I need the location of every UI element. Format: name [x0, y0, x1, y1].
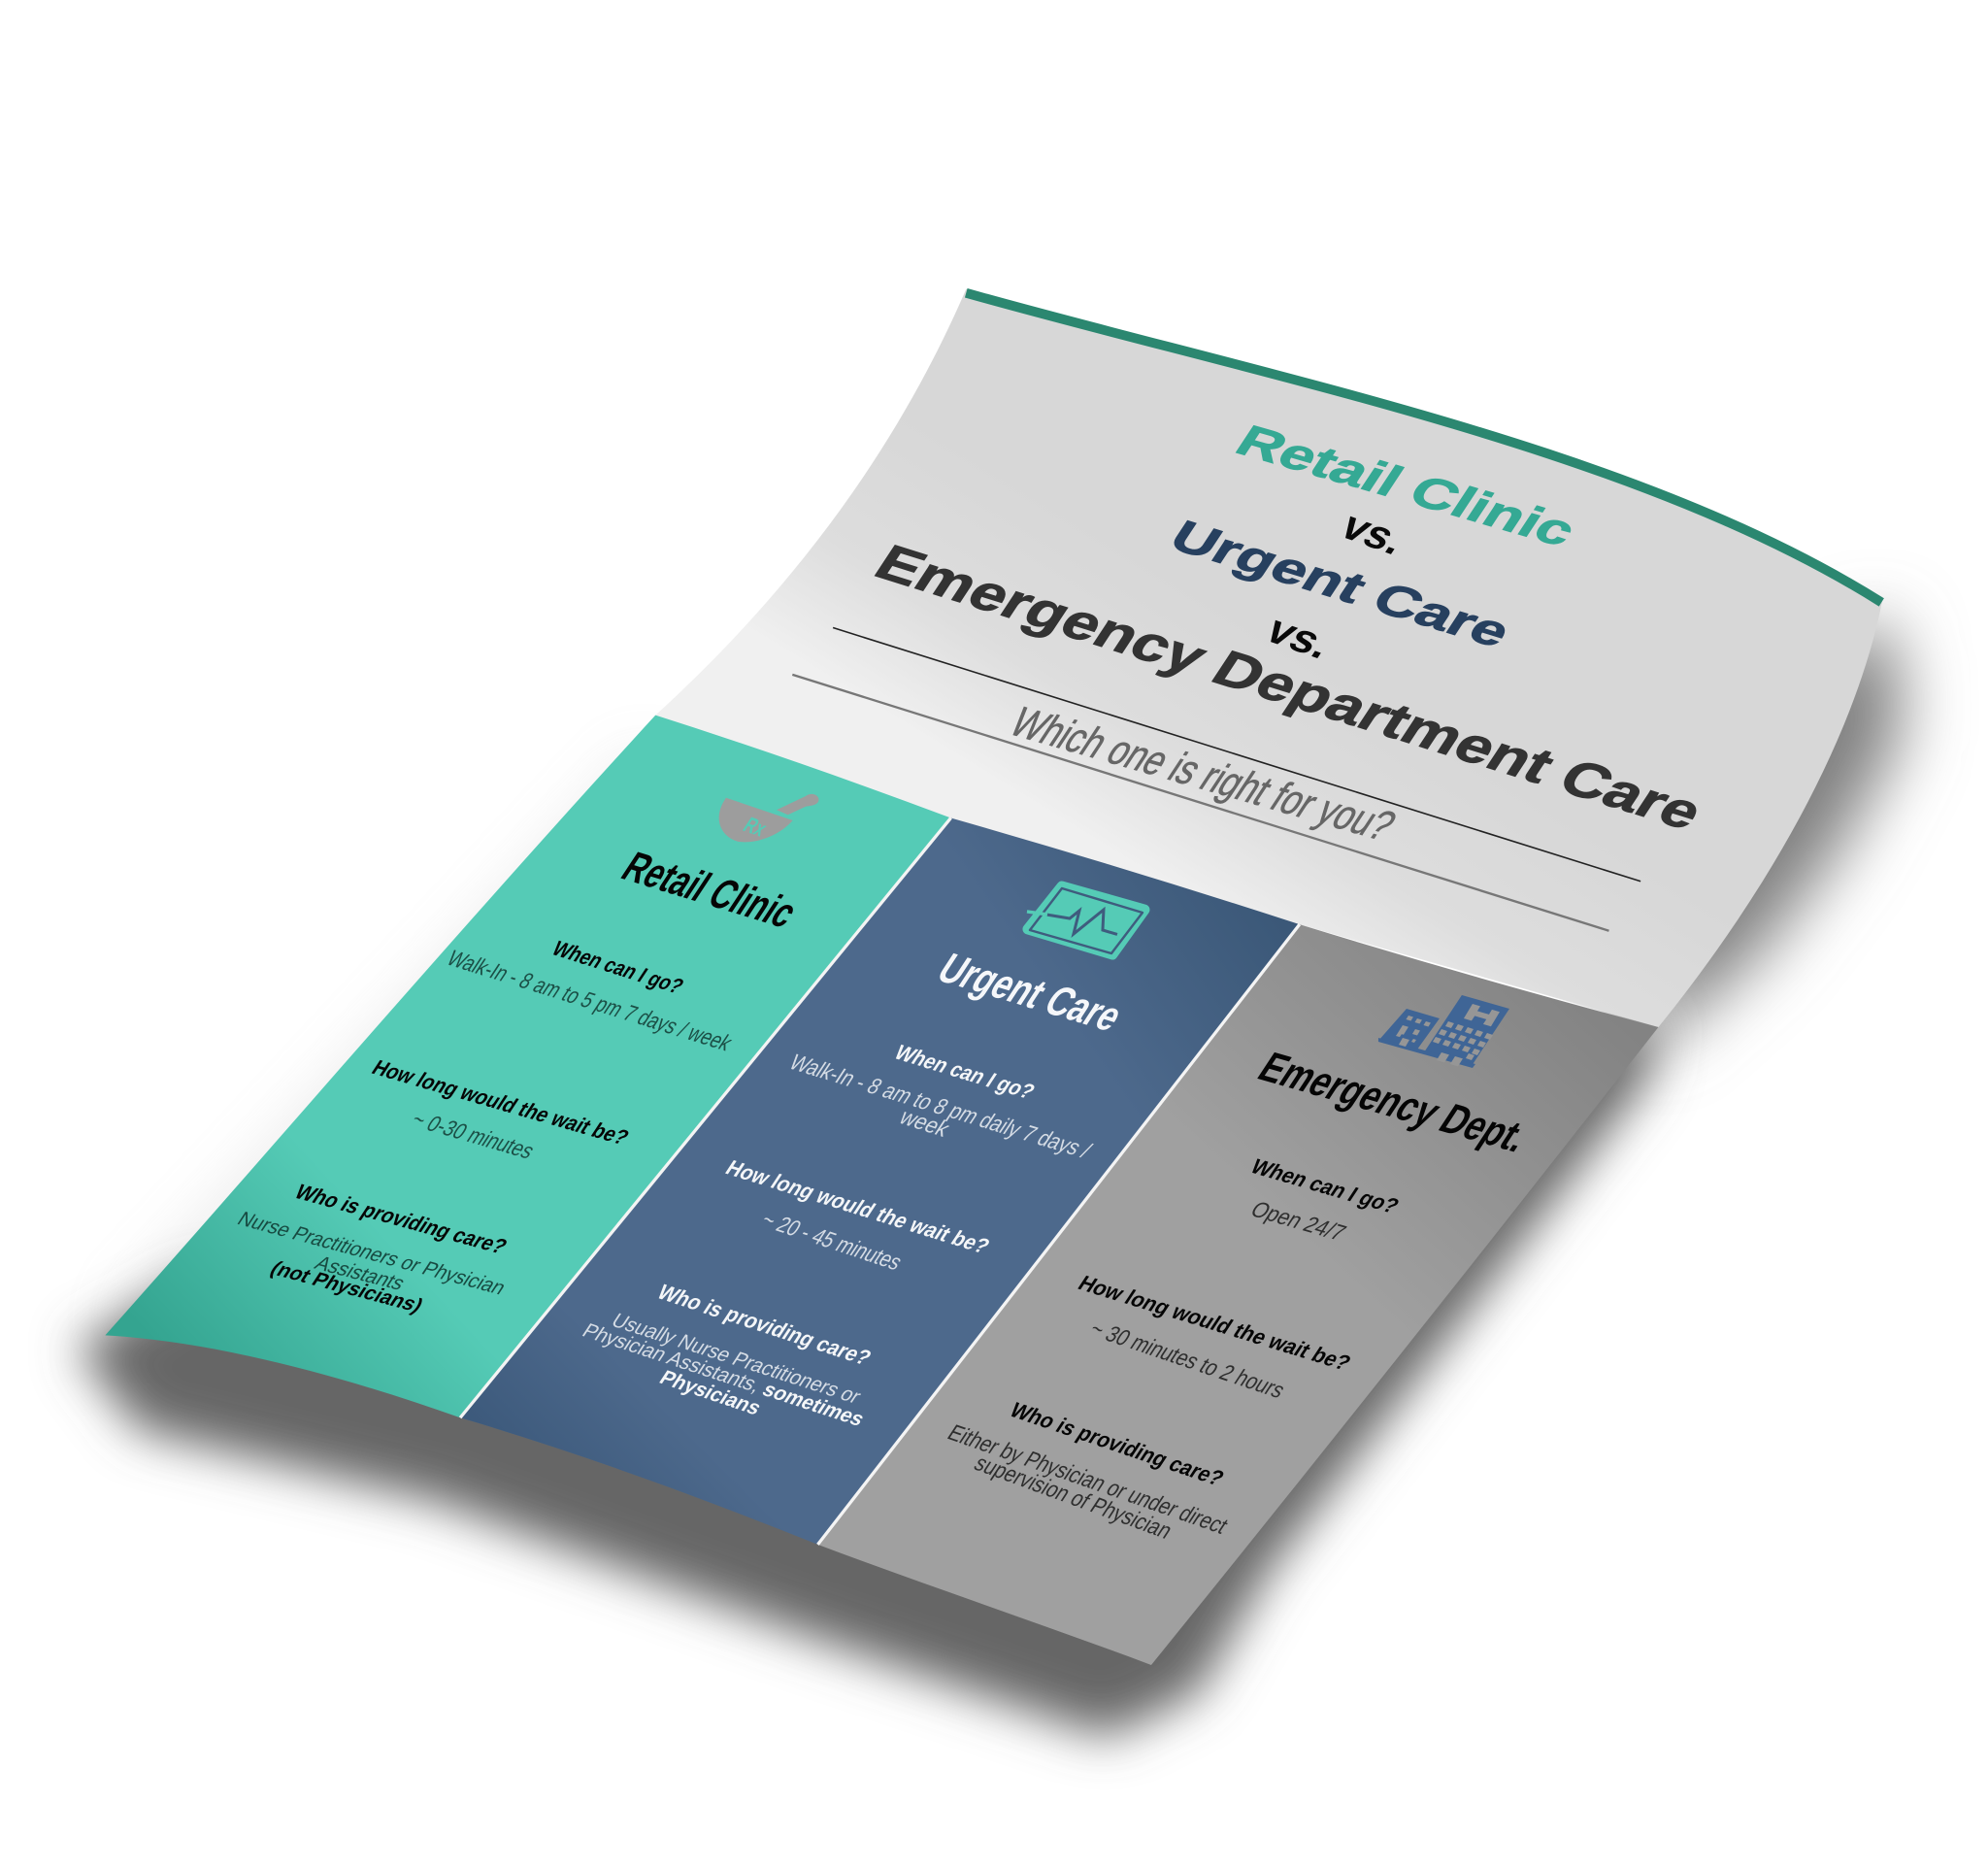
- question: who: Who is providing care?: [290, 1180, 512, 1258]
- answer: when line 1: Walk-In - 8 am to 8 pm daily 7 days /: [784, 1050, 1096, 1163]
- answer: who line 2: Assistants: [311, 1251, 410, 1294]
- question: who: Who is providing care?: [1006, 1398, 1229, 1490]
- answer: who line 1: Either by Physician or under direct: [943, 1421, 1233, 1539]
- title: first vs.: vs.: [1332, 504, 1414, 563]
- icon: mortar and pestle: Rx: [739, 814, 772, 842]
- paper sheet: header area: [655, 289, 1883, 1027]
- answer: who line 2: supervision of Physician: [969, 1451, 1176, 1544]
- answer: when: Open 24/7: [1245, 1198, 1350, 1246]
- question: wait: How long would the wait be?: [721, 1156, 994, 1258]
- title block: [865, 417, 1714, 840]
- title: Emergency Department Care: Emergency Department Care: [865, 534, 1714, 840]
- answer: when: Walk-In - 8 am to 5 pm 7 days / week: [442, 947, 737, 1056]
- answer: wait: ~ 30 minutes to 2 hours: [1084, 1317, 1289, 1403]
- panel: emergency department content: [943, 995, 1539, 1544]
- answer: who line 1: Usually Nurse Practitioners or: [607, 1309, 866, 1408]
- panel: retail clinic column background: [105, 716, 951, 1417]
- question: when: When can I go?: [1246, 1154, 1404, 1217]
- title: Urgent Care: Urgent Care: [1161, 512, 1520, 657]
- question: wait: How long would the wait be?: [1074, 1272, 1355, 1375]
- panel: urgent care column background: [460, 817, 1300, 1545]
- title: Retail Clinic: Retail Clinic: [1227, 417, 1585, 555]
- title: second vs.: vs.: [1257, 608, 1342, 667]
- answer: when line 2: week: [894, 1105, 954, 1142]
- question: when: When can I go?: [547, 937, 688, 998]
- icon: hospital buildings: [1378, 995, 1509, 1068]
- icon: heartbeat monitor: [1027, 886, 1144, 954]
- panel: emergency department column background: [817, 924, 1658, 1665]
- subtitle: Which one is right for you?: [1002, 698, 1405, 849]
- subtitle rules and text: [792, 628, 1640, 931]
- heading: Retail Clinic: Retail Clinic: [613, 843, 807, 936]
- answer: wait: ~ 20 - 45 minutes: [756, 1208, 907, 1275]
- question: wait: How long would the wait be?: [368, 1055, 634, 1150]
- icon: mortar and pestle: [719, 794, 819, 842]
- answer: wait: ~ 0-30 minutes: [407, 1108, 539, 1164]
- heading: Urgent Care: Urgent Care: [929, 944, 1132, 1040]
- drop shadow under the paper: [76, 615, 1902, 1737]
- answer: who line 3: Physicians: [655, 1366, 766, 1419]
- heading: Emergency Dept.: Emergency Dept.: [1250, 1043, 1539, 1160]
- answer: who line 1: Nurse Practitioners or Physician: [233, 1208, 511, 1299]
- question: who: Who is providing care?: [653, 1281, 876, 1370]
- question: when: When can I go?: [890, 1041, 1040, 1103]
- panel: urgent care content: [578, 886, 1144, 1430]
- answer: who line 3: (not Physicians): [266, 1257, 428, 1316]
- answer: who line 2: Physician Assistants, sometimes: [578, 1319, 870, 1430]
- green top band: [966, 293, 1881, 602]
- panel: retail clinic content: [233, 794, 819, 1316]
